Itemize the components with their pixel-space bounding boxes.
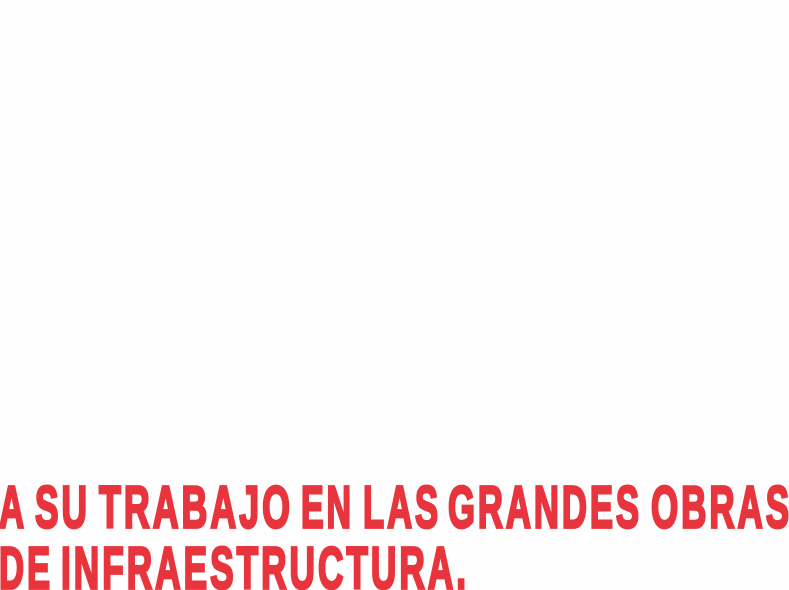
- heading line 1: TRABAJO: [99, 475, 293, 541]
- heading line 1: [0, 475, 789, 541]
- heading line 1: EN: [301, 475, 354, 541]
- heading line 2: [0, 536, 469, 590]
- heading line 1: GRANDES: [448, 475, 642, 541]
- heading line 1: SU: [35, 475, 90, 541]
- heading line 1: A: [0, 475, 27, 541]
- heading line 1: LAS: [363, 475, 441, 541]
